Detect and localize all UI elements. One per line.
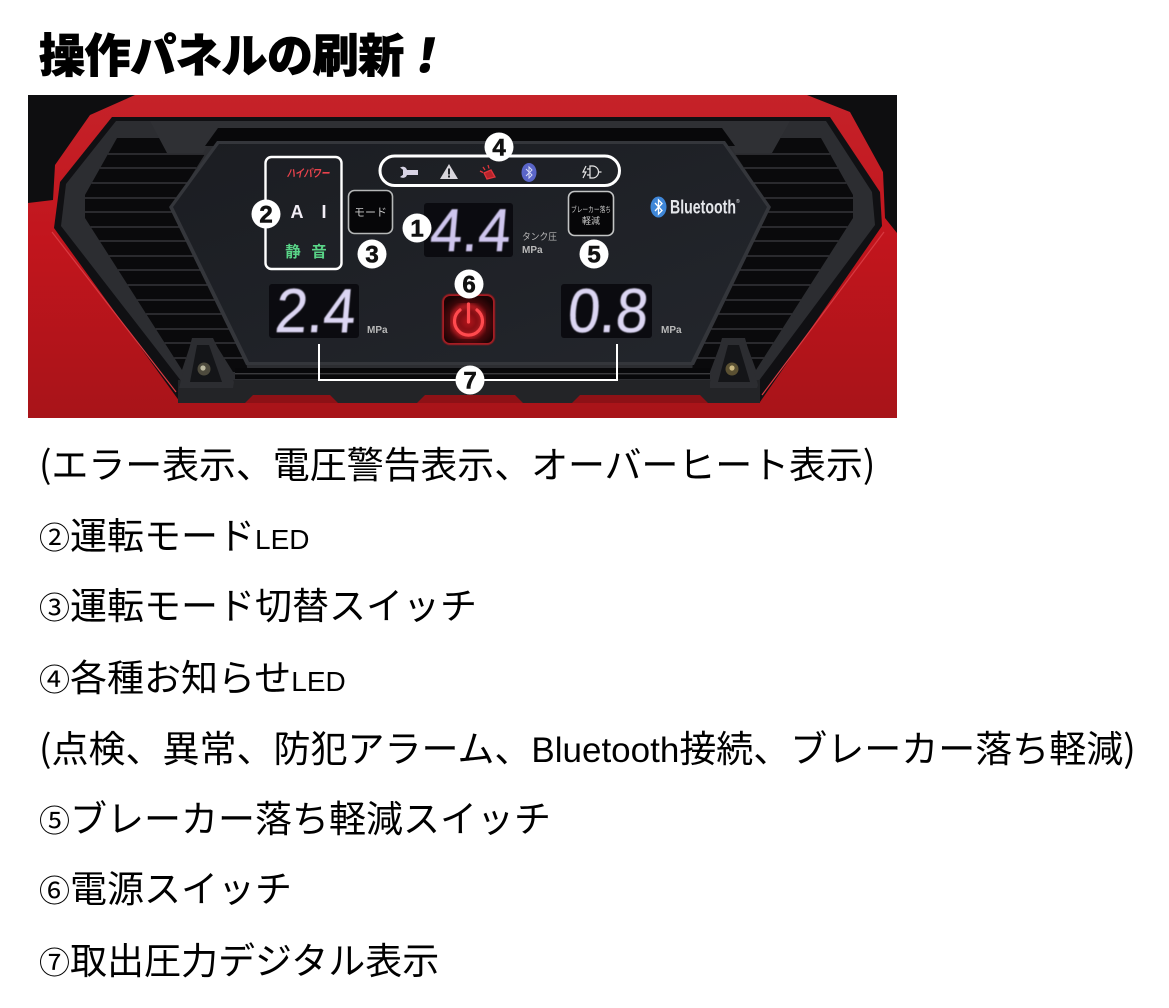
operating mode LED box: 音 (311, 243, 327, 261)
number badge 7 (456, 366, 484, 394)
text: item 3: ③運転モード切替スイッチ (39, 576, 477, 630)
number badge 2 (252, 200, 280, 228)
number badge 3: 3 (365, 242, 379, 268)
number badge 6: 6 (462, 272, 476, 298)
red highlight edges (52, 232, 884, 395)
text: item 7: ⑦取出圧力デジタル表示 (39, 931, 439, 985)
tank pressure label (522, 232, 557, 256)
top wedges and black top band (150, 121, 790, 153)
number badge 7: 7 (463, 368, 477, 394)
breaker trip reduction button (568, 192, 614, 236)
black background corners (28, 95, 135, 203)
number badge 4: 4 (492, 134, 506, 162)
icon: plug with lightning (583, 166, 602, 178)
grille (85, 138, 248, 372)
tank pressure label: タンク圧 (522, 232, 557, 243)
breaker trip reduction button: ブレーカー落ち (571, 204, 611, 214)
screw mount left (179, 338, 234, 388)
panel face (173, 144, 767, 362)
text: item 4: ④各種お知らせLED (39, 648, 346, 702)
text: display note: (エラー表示、電圧警告表示、オーバーヒート表示) (39, 435, 875, 489)
power button (442, 294, 495, 345)
operating mode LED box: I (321, 202, 327, 222)
number badge 4 (484, 132, 514, 162)
number badge 1 (402, 214, 432, 242)
panel: product photo of control panel (28, 95, 897, 418)
tank pressure digital display: 4.4 (428, 197, 514, 264)
text: item 6: ⑥電源スイッチ (39, 859, 292, 913)
mode button: モード (354, 207, 387, 219)
operating mode LED box: ハイパワー (286, 167, 330, 180)
right output pressure display: 0.8 (565, 277, 651, 346)
text: item 5: ⑤ブレーカー落ち軽減スイッチ (39, 789, 551, 843)
icon pill: notification LEDs (380, 156, 620, 186)
title: 操作パネルの刷新 (39, 30, 404, 82)
mode button (348, 190, 392, 234)
icon: warning triangle (440, 164, 458, 179)
red body (28, 95, 897, 418)
operating mode LED box: A (290, 202, 304, 222)
number badge 6 (454, 270, 484, 298)
screw mount right (710, 338, 758, 388)
number badge 1: 1 (410, 216, 424, 242)
operating mode LED box: 静 (285, 243, 301, 261)
number badge 5: 5 (587, 242, 601, 268)
breaker trip reduction button: 軽減 (582, 215, 600, 226)
number badge 3 (358, 240, 386, 268)
number badge 5 (580, 240, 608, 268)
Bluetooth logo (650, 196, 740, 218)
number badge 2: 2 (259, 202, 273, 228)
icon: bluetooth oval (522, 163, 536, 182)
right MPa label: MPa (661, 325, 682, 336)
icon: wrench (400, 167, 418, 178)
text: item 4 details: (点検、異常、防犯アラーム、Bluetooth接続、ブレーカー落ち軽減) (39, 719, 1136, 773)
operating mode LED box (266, 157, 342, 269)
panel edge (169, 141, 771, 365)
notches (245, 395, 708, 403)
icon: alarm (480, 165, 495, 179)
lower slots and bar (235, 368, 710, 379)
frame (54, 117, 882, 402)
Bluetooth logo: Bluetooth (670, 198, 736, 218)
left MPa label: MPa (367, 325, 388, 336)
bracket for output displays (319, 344, 617, 380)
title: ！ (399, 30, 454, 82)
tank pressure label: MPa (522, 245, 543, 256)
Bluetooth logo: ® (736, 198, 740, 205)
text: item 2: ②運転モードLED (39, 506, 309, 560)
left output pressure display: 2.4 (273, 277, 359, 346)
